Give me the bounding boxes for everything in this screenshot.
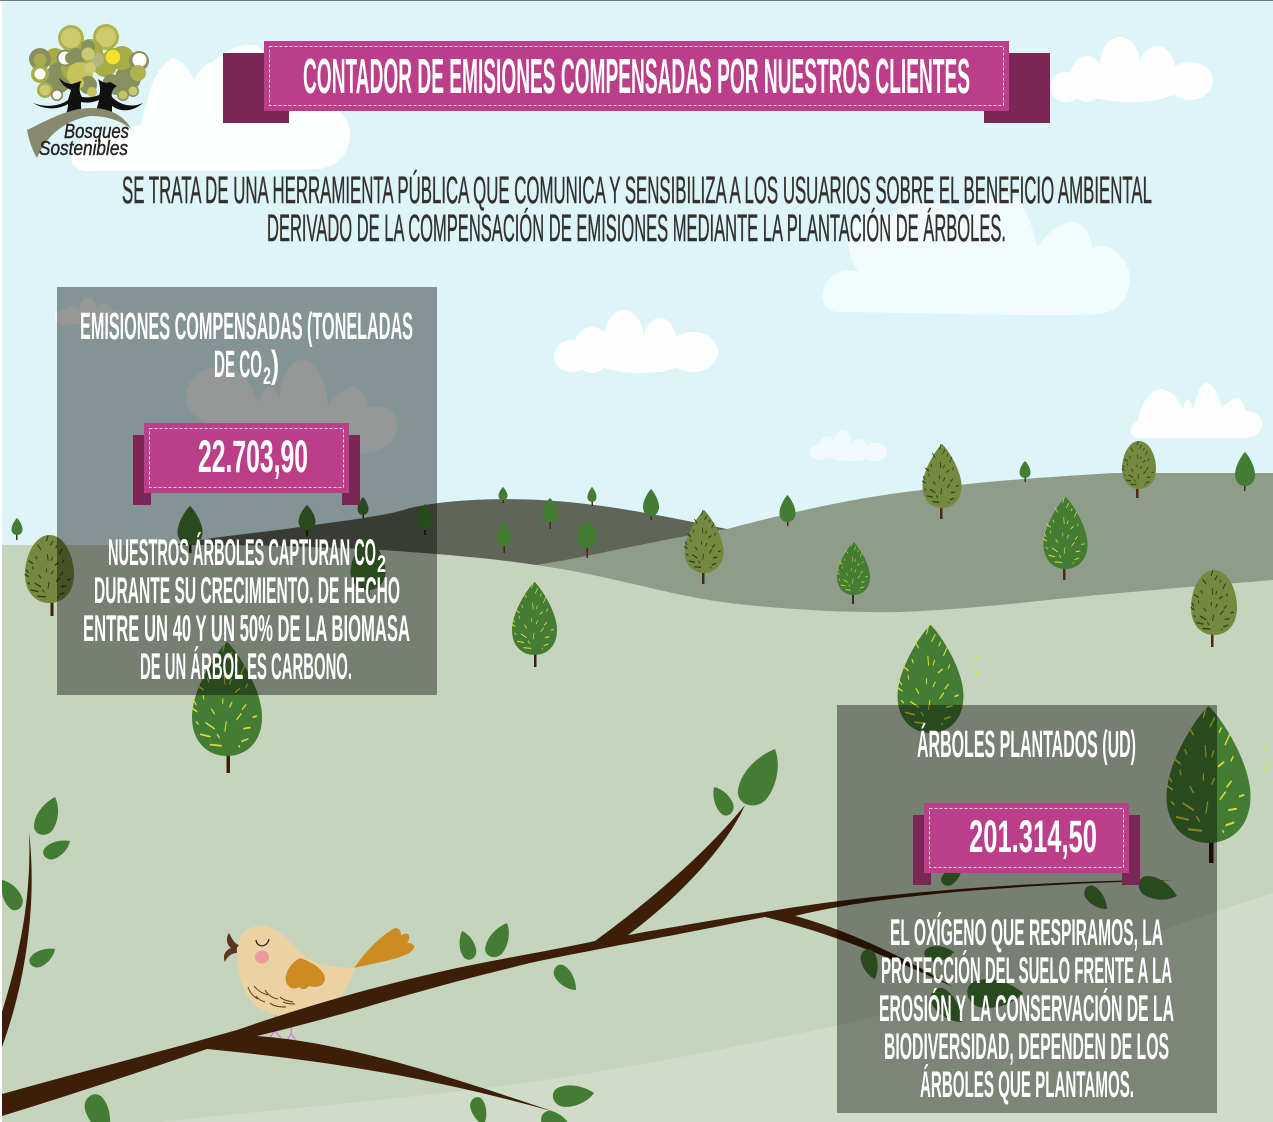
tree: plain hill group (498, 487, 508, 503)
leaves (0, 742, 1180, 1122)
text: emisiones description (83, 532, 410, 687)
branch: main with forks (2, 805, 1175, 1116)
heading: emisiones: DE CO (214, 344, 262, 386)
bird wing (286, 958, 325, 989)
cloud center (554, 310, 718, 373)
text: ENTRE UN 40 Y UN 50% DE LA BIOMASA (83, 608, 410, 649)
hill: dark back hill (170, 499, 727, 620)
tree: plain hill group 4 (588, 487, 596, 506)
heading: emisiones: 2 (263, 363, 271, 390)
tree: plain hill group 6 (643, 489, 659, 520)
tree: yellow-flecked 853 (837, 542, 870, 604)
ribbon: emisiones value: 22.703,90 (198, 431, 308, 482)
tree: plain tiny (358, 497, 368, 518)
bird (224, 926, 414, 1040)
cloud in left panel (186, 360, 397, 455)
intro text (122, 169, 1152, 250)
ground: main meadow (2, 545, 1273, 1122)
top border line (0, 0, 1273, 1)
logo: Bosques Sostenibles (27, 24, 149, 160)
tree: plain at 1245 (1235, 452, 1255, 491)
large pale cloud right (823, 195, 1130, 315)
bird body (237, 926, 356, 1017)
tree: plain at panel edge (416, 504, 434, 535)
text: emisiones description: DE UN ÁRBOL ES CARBONO. (140, 646, 352, 687)
hill: grey right hill (536, 473, 1273, 620)
tree: plain at 1025 (1020, 461, 1030, 482)
tree: small far left (12, 518, 22, 540)
tree: yellow-flecked centre right (898, 625, 979, 733)
ribbon: arboles value: 201.314,50 (969, 811, 1097, 862)
tree: plain hill group 2 (542, 498, 558, 529)
text: NUESTROS ÁRBOLES CAPTURAN CO (108, 532, 376, 573)
tree: olive 942 (922, 444, 962, 519)
bird legs (270, 1010, 296, 1040)
ribbon: arboles value (913, 803, 1140, 885)
small cloud in left panel (55, 297, 125, 327)
text: DURANTE SU CRECIMIENTO. DE HECHO (94, 570, 400, 611)
panel: arboles plantados (837, 705, 1217, 1113)
panel: emisiones compensadas (57, 287, 437, 695)
ribbon: emisiones value (133, 423, 360, 505)
tree: olive left (25, 535, 74, 616)
tree: plain behind left panel 2 (298, 505, 316, 536)
cloud behind logo and title (71, 45, 350, 171)
ground: lower light meadow (158, 893, 1273, 1122)
heading: emisiones: ) (271, 344, 279, 386)
title ribbon (223, 41, 1050, 123)
tree: yellow-flecked large right (1166, 706, 1268, 863)
tree: yellow-flecked 1065 (1044, 497, 1088, 580)
bird crest (224, 933, 239, 962)
tree: plain hill group 5 (577, 520, 597, 558)
tree: olive 1139 (1122, 441, 1156, 498)
logo: swoosh (27, 108, 131, 158)
tree: plain behind left panel (178, 506, 202, 553)
small cloud above hills (810, 430, 887, 461)
bird tail (354, 928, 414, 968)
logo: wordmark line 2: Sostenibles (39, 138, 128, 160)
branch: left edge (2, 832, 32, 1047)
bird cheek (255, 950, 269, 964)
cloud top right (1050, 37, 1213, 102)
tree: olive 704 (684, 510, 724, 584)
logo: tree canopy (29, 24, 149, 101)
tree: plain at 787 (780, 495, 796, 526)
bird feathers (248, 986, 295, 1007)
text: EMISIONES COMPENSADAS (TONELADAS (80, 306, 413, 348)
text: emisiones description: 2 (377, 551, 386, 578)
bird eye (256, 939, 269, 946)
heading: emisiones (80, 306, 413, 390)
tree: plain behind paragraph (350, 535, 386, 600)
logo: wordmark line 1: Bosques (64, 121, 129, 143)
tree: yellow-flecked 534 (512, 582, 557, 667)
cloud right low (1130, 383, 1262, 438)
tree: olive 1214 (1191, 570, 1237, 647)
tree: yellow-flecked large left (192, 642, 262, 773)
logo: trunks (33, 78, 143, 116)
left page margin (0, 1, 2, 1122)
tree: plain hill group 3 (496, 522, 512, 553)
text: arboles description (879, 912, 1174, 1105)
